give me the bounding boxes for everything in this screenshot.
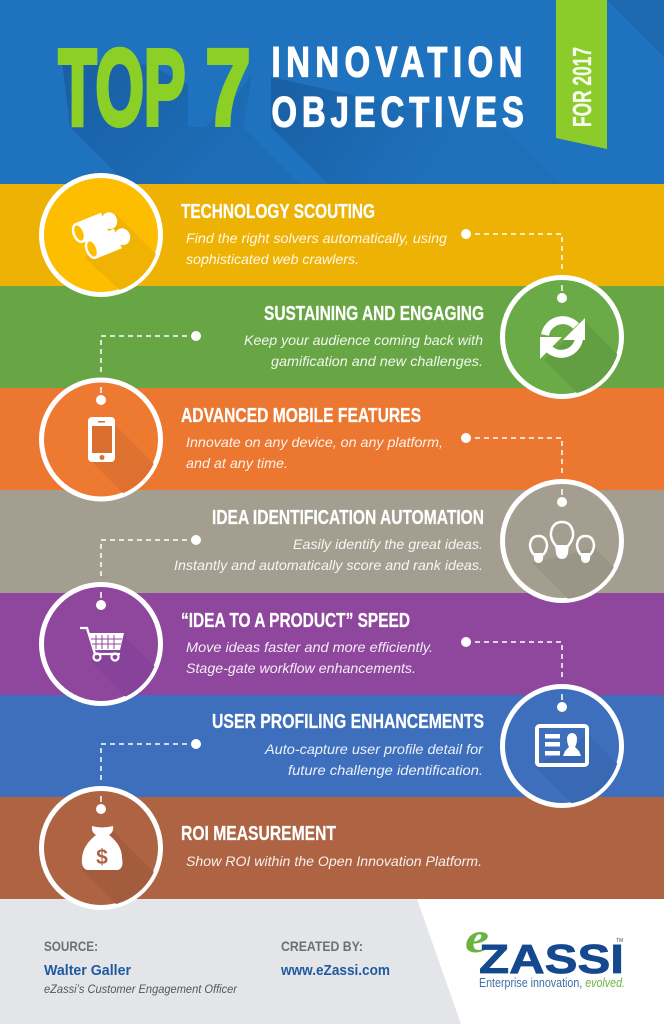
connector: mobile to idea identification [461, 433, 562, 475]
description: Auto-capture user profile detail for [264, 741, 484, 757]
created by credit [280, 938, 390, 979]
description [174, 536, 483, 573]
panel: user profiling enhancements [0, 695, 664, 797]
icon badge: binoculars [39, 173, 163, 297]
description [264, 741, 484, 778]
title: innovation objectives: OBJECTIVES [272, 88, 524, 137]
title long shadow [62, 0, 664, 184]
icon: shopping cart [80, 628, 124, 660]
panel: idea identification automation [0, 490, 664, 593]
description: Keep your audience coming back with [244, 332, 483, 348]
connector: identification to product speed [101, 535, 201, 578]
heading: IDEA IDENTIFICATION AUTOMATION [212, 507, 484, 529]
description: Move ideas faster and more efficiently. [186, 639, 433, 655]
description [244, 332, 483, 369]
icon: ID card [537, 726, 587, 765]
title: innovation objectives: INNOVATION [272, 38, 522, 87]
heading: “IDEA TO A PRODUCT” SPEED [181, 610, 410, 632]
heading: ROI MEASUREMENT [181, 823, 336, 845]
title: top 7: TOP [58, 26, 186, 148]
panel: ROI measurement [0, 797, 664, 899]
icon badge: shopping cart [39, 582, 163, 706]
source credit: SOURCE: [44, 938, 98, 954]
panel: footer [0, 899, 664, 1024]
description: and at any time. [186, 455, 288, 471]
icon: money bag [82, 826, 122, 870]
logo: eZassi: ZASSI [479, 936, 624, 982]
panel: idea to a product speed [0, 593, 664, 695]
ribbon: for 2017: FOR 2017 [567, 47, 597, 127]
description: Instantly and automatically score and rank ideas. [174, 557, 483, 573]
icon badge: ID card [500, 684, 624, 808]
title: top 7: 7 [206, 26, 250, 148]
logo: eZassi [465, 916, 625, 990]
description [186, 434, 443, 471]
source credit [44, 938, 238, 996]
ribbon: for 2017 [556, 0, 607, 149]
icon badge: light bulbs [500, 479, 624, 603]
connector: scouting to sustaining [461, 229, 562, 271]
icon badge: mobile phone [39, 378, 163, 502]
description: Easily identify the great ideas. [293, 536, 483, 552]
panel: advanced mobile features [0, 388, 664, 490]
title: innovation objectives [272, 38, 524, 137]
panel: sustaining and engaging [0, 286, 664, 388]
created by credit: www.eZassi.com [280, 963, 390, 979]
description: gamification and new challenges. [271, 353, 483, 369]
heading: TECHNOLOGY SCOUTING [181, 201, 375, 223]
description: Stage-gate workflow enhancements. [186, 660, 416, 676]
icon: phone [88, 417, 115, 462]
source credit: Walter Galler [44, 963, 131, 979]
description: sophisticated web crawlers. [186, 251, 359, 267]
icon badge: money bag [39, 786, 163, 910]
description [186, 639, 433, 676]
icon: sync arrows [540, 318, 585, 359]
description: Show ROI within the Open Innovation Platform. [186, 853, 482, 869]
created by credit: CREATED BY: [281, 938, 363, 954]
description: Find the right solvers automatically, using [186, 230, 447, 246]
logo: eZassi: Enterprise innovation, evolved. [479, 975, 625, 990]
icon: money bag: $ [96, 846, 108, 869]
panel: technology scouting [0, 184, 664, 286]
heading: USER PROFILING ENHANCEMENTS [212, 711, 484, 733]
heading: SUSTAINING AND ENGAGING [264, 303, 484, 325]
description: future challenge identification. [288, 762, 483, 778]
logo: eZassi: e [465, 916, 489, 962]
connector: sustaining to mobile [101, 331, 201, 374]
heading: ADVANCED MOBILE FEATURES [181, 405, 421, 427]
connector dots inside badges [96, 285, 567, 814]
panel: header [0, 0, 664, 184]
description: Innovate on any device, on any platform, [186, 434, 443, 450]
logo: eZassi: TM [616, 938, 623, 944]
icon: light bulbs [530, 522, 594, 563]
connector: product speed to user profiling [461, 637, 562, 679]
source credit: eZassi’s Customer Engagement Officer [44, 984, 238, 996]
icon: binoculars [69, 208, 133, 261]
icon badge: sync [500, 275, 624, 399]
description [186, 230, 447, 267]
connector: user profiling to ROI [101, 739, 201, 782]
